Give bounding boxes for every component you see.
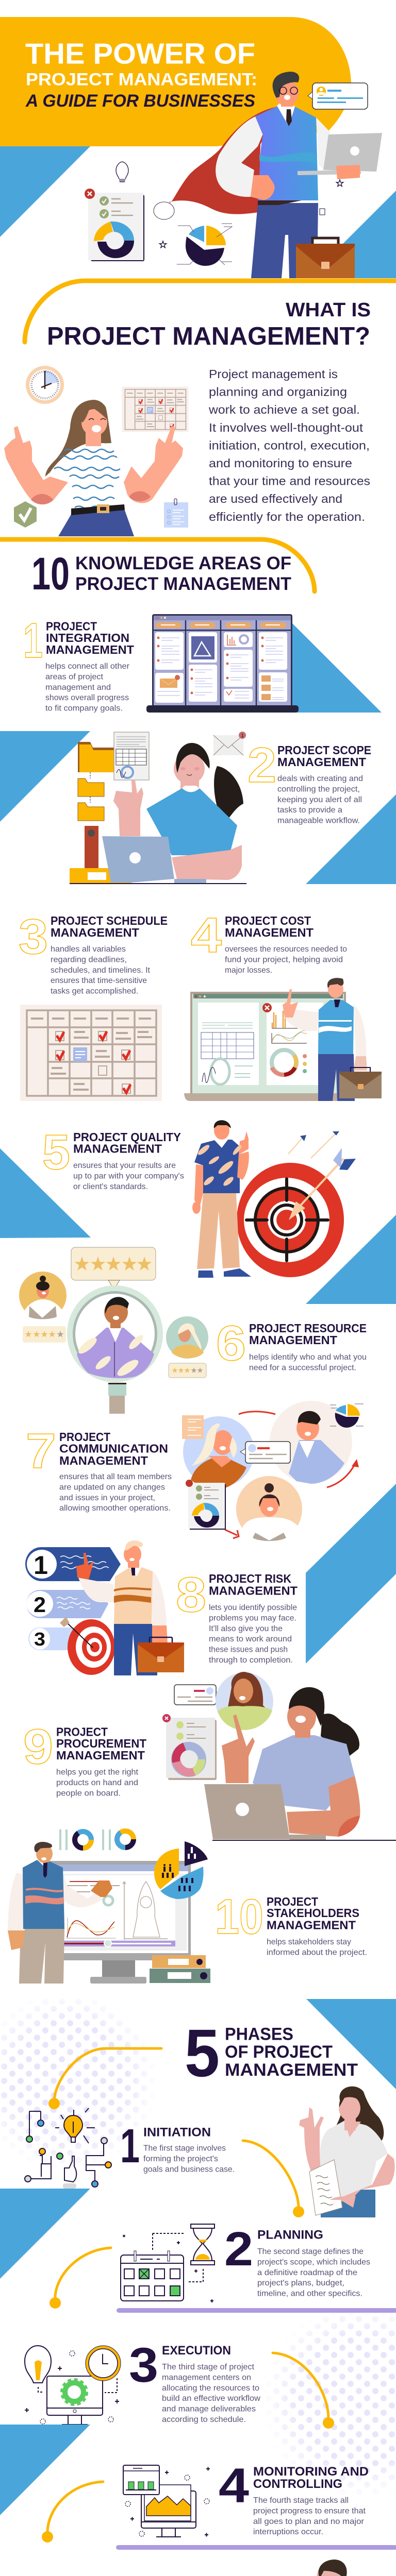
panel: phase 5 closure	[0, 2560, 382, 2576]
speech bubble	[240, 1442, 290, 1463]
description: The first stage involves	[143, 2144, 226, 2153]
heading: MANAGEMENT	[277, 755, 366, 769]
description: controlling the project,	[277, 785, 360, 793]
description: helps identify who and what you	[249, 1353, 367, 1362]
number 4: 4	[219, 2459, 249, 2513]
description: regarding deadlines,	[51, 955, 127, 964]
description: ensures that time-sensitive	[51, 976, 147, 985]
section heading: 5 phases: PHASES	[225, 2025, 293, 2044]
description: means to work around	[209, 1635, 292, 1643]
icon: envelope	[213, 732, 246, 755]
dots background	[274, 2314, 395, 2487]
avatar: woman with bun	[19, 1272, 67, 1320]
section heading: 10 knowledge areas: PROJECT MANAGEMENT	[75, 574, 291, 594]
definition text: planning and organizing	[209, 385, 347, 399]
heading	[56, 1725, 146, 1762]
numbered step tags: 3	[34, 1629, 45, 1650]
icon: envelope: 1	[241, 733, 244, 739]
panel: 6 project resource management	[19, 1247, 367, 1414]
background triangles	[0, 1148, 396, 1304]
description: ensures that all team members	[59, 1472, 172, 1481]
section heading: 5 phases: MANAGEMENT	[225, 2060, 358, 2080]
title	[25, 37, 257, 111]
description: fund your project, helping avoid	[225, 955, 343, 964]
panel: 2 project scope management	[0, 731, 396, 884]
heading: MONITORING AND	[253, 2465, 369, 2479]
rating card: three stars	[169, 1363, 206, 1378]
avatar: blonde woman	[166, 1316, 208, 1359]
number 2: 2	[248, 738, 276, 793]
definition text: that your time and resources	[209, 474, 370, 488]
rating card: four stars	[23, 1326, 66, 1343]
description: areas of project	[45, 672, 104, 681]
number 10: 10	[215, 1889, 263, 1944]
heading: INTEGRATION	[46, 631, 129, 645]
description	[51, 945, 151, 996]
panel: 9 project procurement management	[23, 1672, 396, 1840]
definition text: and monitoring to ensure	[209, 456, 352, 470]
description: problems you may face.	[209, 1614, 296, 1622]
description: management centers on	[162, 2373, 251, 2382]
description	[267, 1938, 367, 1957]
illustration: magnifier with man	[67, 1285, 163, 1414]
illustration: woman with paper	[299, 2087, 395, 2217]
numbered step tags: 2	[34, 1592, 46, 1617]
heading: MANAGEMENT	[249, 1333, 337, 1347]
heading: PROJECT SCHEDULE	[51, 914, 168, 927]
heading: PROJECT	[59, 1430, 110, 1444]
description	[225, 945, 347, 975]
description: manageable workflow.	[277, 817, 360, 825]
number 3: 3	[19, 909, 48, 964]
heading	[249, 1321, 367, 1347]
rating card: five stars	[71, 1247, 156, 1290]
number 3: 3	[129, 2338, 158, 2393]
illustration: woman with laptop	[204, 1687, 396, 1840]
divider bar	[116, 2545, 396, 2550]
definition text: initiation, control, execution,	[209, 438, 370, 452]
panel: phase 4 monitoring and controlling	[42, 2459, 396, 2550]
number 9: 9	[23, 1719, 53, 1774]
definition text: are used effectively and	[209, 492, 342, 505]
connector	[50, 2248, 111, 2309]
heading: PROJECT	[46, 619, 97, 633]
description: goals and business case.	[143, 2165, 235, 2174]
illustration: man with raised finger	[192, 1120, 251, 1278]
description	[209, 1603, 297, 1665]
panel: 10 project stakeholders management	[8, 1829, 367, 1984]
icon: clipboard	[182, 1415, 204, 1439]
icon: wall clock	[26, 366, 64, 404]
description	[249, 1353, 367, 1372]
heading: INITIATION	[143, 2126, 211, 2139]
hero panel	[0, 17, 396, 278]
illustration: calendar	[20, 1005, 162, 1101]
icon: briefcase	[296, 238, 355, 278]
heading	[267, 1895, 359, 1932]
description: ensures that your results are	[73, 1161, 176, 1170]
description: helps you get the right	[56, 1768, 139, 1776]
heading: WHAT IS	[286, 299, 371, 321]
description: The third stage of project	[162, 2363, 255, 2371]
section heading: 10 knowledge areas	[0, 539, 315, 599]
definition text: Project management is	[209, 367, 338, 381]
heading	[47, 299, 371, 350]
description: forming the project's	[143, 2155, 218, 2163]
description: keeping you alert of all	[277, 795, 362, 804]
number 4: 4	[191, 908, 222, 963]
illustration: target and dart	[60, 1617, 115, 1675]
description: management and	[45, 683, 111, 692]
document with donut	[186, 1480, 226, 1530]
description: helps stakeholders stay	[267, 1938, 351, 1946]
description	[59, 1472, 172, 1513]
illustration: woman pointing up	[4, 400, 183, 536]
number 1: 1	[120, 2119, 140, 2173]
folders and document	[78, 732, 149, 821]
heading: MANAGEMENT	[73, 1142, 162, 1155]
yellow arc	[25, 281, 396, 342]
panel: what is project management	[4, 281, 396, 536]
panel: 4 project cost management	[184, 908, 382, 1101]
description: through to completion.	[209, 1656, 293, 1665]
heading: PROJECT COST	[225, 914, 311, 927]
description: oversees the resources needed to	[225, 945, 347, 954]
illustration: target and arrows	[237, 1131, 356, 1277]
heading: STAKEHOLDERS	[267, 1906, 359, 1920]
number 6: 6	[216, 1316, 246, 1371]
small pie chart	[330, 1404, 364, 1428]
description: build an effective workflow	[162, 2394, 260, 2403]
people pie chart	[154, 1841, 208, 1899]
panel: phase 1 initiation	[0, 2087, 395, 2279]
description: project's plans, budget,	[257, 2279, 344, 2287]
pie chart	[154, 202, 232, 266]
heading	[51, 914, 168, 939]
heading: PROJECT QUALITY	[73, 1130, 181, 1144]
icon: clipboard	[164, 499, 188, 528]
panel: 8 project risk management	[25, 1484, 396, 1675]
document with donut	[162, 1714, 217, 1780]
heading: MANAGEMENT	[59, 1454, 148, 1467]
description: a definitive roadmap of the	[257, 2268, 357, 2277]
heading	[253, 2465, 369, 2491]
heading	[46, 619, 134, 656]
background triangle	[0, 2189, 90, 2279]
description: tasks to provide a	[277, 806, 342, 815]
definition text: work to achieve a set goal.	[208, 403, 360, 416]
heading: PROJECT RESOURCE	[249, 1321, 367, 1335]
description: up to par with your company's	[73, 1172, 184, 1180]
number 7: 7	[26, 1423, 56, 1479]
description: deals with creating and	[277, 774, 363, 783]
icon: idea circuit	[25, 2108, 111, 2189]
numbered step tags: 1	[34, 1551, 48, 1580]
description: are updated on any changes	[59, 1483, 165, 1492]
illustration: man in suit	[289, 2560, 382, 2576]
panel: 1 project integration management	[23, 613, 382, 713]
definition text: It involves well-thought-out	[209, 421, 364, 434]
heading: PLANNING	[257, 2228, 323, 2242]
panel: phase 3 execution	[0, 2313, 396, 2515]
heading: PROJECT	[56, 1725, 108, 1738]
panel: 3 project schedule management	[19, 909, 168, 1101]
icon: light bulb	[116, 162, 128, 182]
description: people on board.	[56, 1789, 121, 1798]
description: informed about the project.	[267, 1948, 367, 1957]
section heading: 5 phases	[0, 1999, 396, 2169]
description	[257, 2247, 370, 2298]
description: these issues and push	[209, 1646, 288, 1654]
title: THE POWER OF	[25, 37, 255, 70]
description: and manage deliverables	[162, 2405, 256, 2414]
description: allocating the resources to	[162, 2384, 259, 2393]
number 8: 8	[176, 1567, 206, 1622]
number 5: 5	[42, 1125, 70, 1180]
heading: CONTROLLING	[253, 2477, 342, 2491]
numbered step tags	[25, 1547, 121, 1650]
description: tasks get accomplished.	[51, 987, 138, 996]
description	[162, 2363, 260, 2424]
description: interruptions occur.	[253, 2528, 323, 2536]
panel: phase 2 planning	[50, 2222, 396, 2313]
section heading: 5 phases: 5	[185, 2015, 220, 2091]
description: It'll also give you the	[209, 1624, 283, 1633]
illustration: superhero manager	[169, 72, 382, 278]
connector	[273, 2353, 334, 2429]
connector	[42, 2482, 103, 2543]
background triangles	[0, 731, 396, 884]
illustration: team communication	[183, 1401, 359, 1543]
binders	[70, 826, 131, 884]
description	[253, 2496, 366, 2536]
heading	[209, 1572, 298, 1597]
background triangle	[0, 2425, 90, 2515]
description: timeline, and other specifics.	[257, 2290, 362, 2298]
description: allowing smoother operations.	[59, 1504, 171, 1513]
speech bubble	[174, 1685, 221, 1705]
description: major losses.	[225, 966, 272, 975]
divider bar	[117, 2308, 396, 2313]
icon: green check hexagon	[14, 501, 37, 528]
icon: monitor, bulb and clock	[25, 2346, 121, 2425]
heading: PROJECT	[267, 1895, 318, 1908]
icon: small calendar	[122, 387, 189, 432]
heading	[73, 1130, 181, 1155]
icon: monitor with charts	[123, 2465, 210, 2537]
description: project's scope, which includes	[257, 2258, 370, 2266]
description: all goes to plan and no major	[253, 2517, 365, 2526]
heading: MANAGEMENT	[46, 643, 134, 656]
binders	[150, 1955, 210, 1983]
description: need for a successful project.	[249, 1363, 356, 1372]
panel: 7 project communication management	[26, 1401, 364, 1543]
description: schedules, and timelines. It	[51, 966, 151, 975]
description	[45, 662, 130, 713]
number 1: 1	[23, 613, 43, 668]
panel: 5 project quality management	[0, 1120, 396, 1304]
speech bubble	[308, 83, 368, 109]
section heading: 5 phases: OF PROJECT	[225, 2042, 333, 2062]
avatar: woman in green	[216, 1672, 273, 1730]
description: and issues in your project,	[59, 1494, 155, 1502]
heading	[277, 743, 371, 769]
illustration: businessman with briefcase	[76, 1540, 184, 1675]
small donut charts	[60, 1829, 134, 1850]
illustration: dashboard laptop	[184, 992, 354, 1101]
description: project progress to ensure that	[253, 2506, 366, 2515]
connector	[243, 2141, 304, 2217]
heading: MANAGEMENT	[209, 1584, 298, 1597]
description: lets you identify possible	[209, 1603, 297, 1612]
heading: EXECUTION	[162, 2344, 231, 2358]
background band	[306, 1484, 396, 1664]
illustration: man with briefcase	[283, 978, 382, 1101]
illustration: presentation monitor	[48, 1861, 191, 1984]
description	[73, 1161, 184, 1191]
section heading: 10 knowledge areas: KNOWLEDGE AREAS OF	[75, 553, 291, 573]
description	[277, 774, 363, 825]
description: The second stage defines the	[257, 2247, 364, 2256]
document with donut chart	[85, 189, 144, 261]
section heading: 10 knowledge areas: 10	[31, 548, 70, 599]
heading: COMMUNICATION	[59, 1442, 168, 1455]
description: products on hand and	[56, 1778, 138, 1787]
hero background shapes	[0, 17, 396, 278]
description: to fit company goals.	[45, 704, 123, 713]
illustration: woman with laptop	[70, 743, 246, 884]
title: PROJECT MANAGEMENT:	[26, 70, 257, 90]
heading: PROCUREMENT	[56, 1737, 146, 1750]
icon: calendar and hourglass	[121, 2224, 214, 2302]
heading: MANAGEMENT	[51, 926, 139, 939]
heading: PROJECT SCOPE	[277, 743, 371, 757]
heading: PROJECT RISK	[209, 1572, 291, 1585]
description	[56, 1768, 139, 1798]
heading: MANAGEMENT	[56, 1749, 145, 1762]
illustration: kanban laptop	[146, 614, 382, 713]
description: according to schedule.	[162, 2415, 246, 2424]
description: The fourth stage tracks all	[253, 2496, 349, 2505]
description: handles all variables	[51, 945, 126, 954]
heading	[225, 914, 314, 939]
definition text: efficiently for the operation.	[209, 510, 365, 523]
description: shows overall progress	[45, 693, 129, 702]
title: A GUIDE FOR BUSINESSES	[25, 91, 255, 111]
heading: MANAGEMENT	[225, 926, 314, 939]
heading	[59, 1430, 168, 1467]
description: helps connect all other	[45, 662, 130, 671]
definition text	[208, 367, 370, 523]
illustration: presenter	[8, 1842, 112, 1984]
number 2: 2	[224, 2222, 253, 2276]
description: or client's standards.	[73, 1182, 148, 1191]
heading: MANAGEMENT	[267, 1919, 356, 1932]
heading: PROJECT MANAGEMENT?	[47, 323, 370, 350]
description	[143, 2144, 235, 2174]
